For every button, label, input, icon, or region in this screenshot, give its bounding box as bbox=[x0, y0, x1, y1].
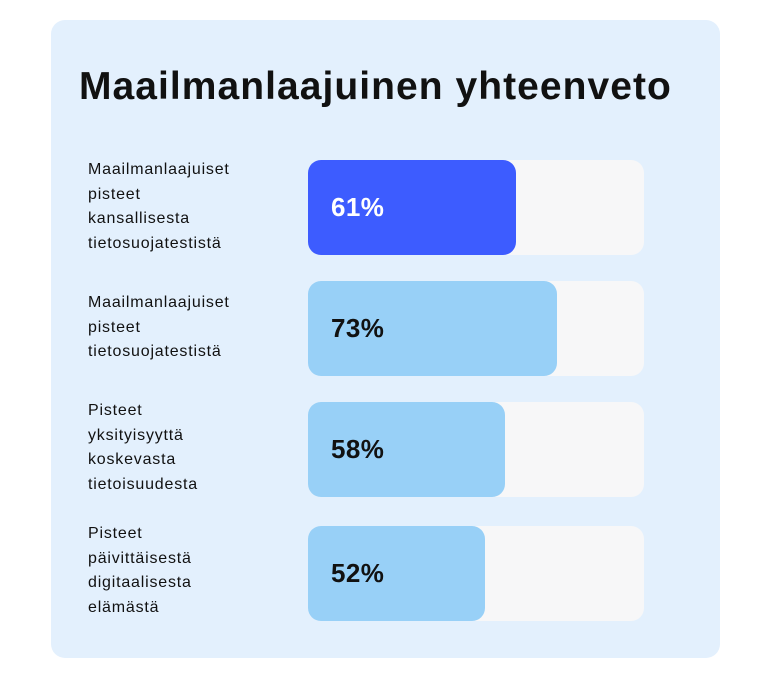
label 4 bbox=[88, 525, 192, 616]
label 3: tietoisuudesta bbox=[88, 476, 198, 492]
bar 3: 58% bbox=[331, 434, 384, 464]
bar 1: 61% bbox=[331, 192, 384, 222]
label 3: koskevasta bbox=[88, 451, 176, 468]
label 2: Maailmanlaajuiset bbox=[88, 294, 230, 311]
label 3: Pisteet bbox=[88, 402, 143, 419]
label 1 bbox=[88, 161, 230, 252]
label 4: päivittäisestä bbox=[88, 550, 192, 566]
bar 4 bbox=[308, 526, 644, 621]
bar 2 bbox=[308, 281, 644, 376]
bar 1 bbox=[308, 160, 644, 255]
label 4: elämästä bbox=[88, 598, 159, 616]
label 2 bbox=[88, 294, 230, 360]
label 3 bbox=[88, 402, 198, 492]
bar 3 bbox=[308, 402, 644, 497]
label 1: tietosuojatestistä bbox=[88, 234, 222, 252]
label 3: yksityisyyttä bbox=[88, 426, 184, 444]
label 2: pisteet bbox=[88, 318, 141, 336]
bar 4: 52% bbox=[331, 558, 384, 588]
label 2: tietosuojatestistä bbox=[88, 343, 222, 360]
label 1: pisteet bbox=[88, 186, 141, 202]
label 1: Maailmanlaajuiset bbox=[88, 161, 230, 178]
title: Maailmanlaajuinen yhteenveto bbox=[79, 65, 672, 108]
label 1: kansallisesta bbox=[88, 210, 190, 227]
label 4: Pisteet bbox=[88, 525, 143, 542]
bar 2: 73% bbox=[331, 313, 384, 343]
label 4: digitaalisesta bbox=[88, 574, 192, 591]
